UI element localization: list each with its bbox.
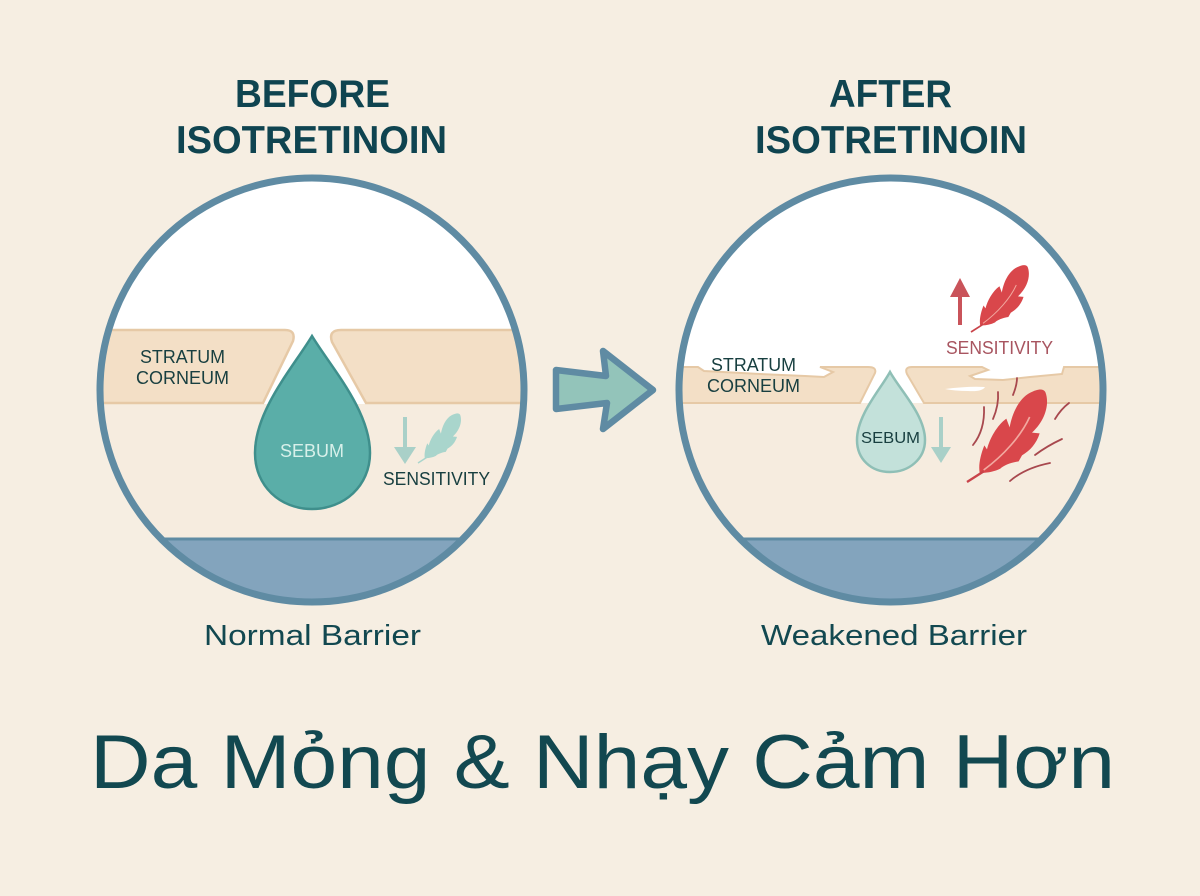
label: stratum corneum damaged: [707, 355, 800, 396]
dermis layer: [164, 538, 460, 598]
icon: sebum down arrow: [931, 417, 951, 463]
label: stratum corneum damaged: STRATUM: [711, 355, 796, 375]
circle outline: [679, 178, 1103, 602]
label: sensitivity low: SENSITIVITY: [383, 469, 490, 489]
label: sensitivity high: SENSITIVITY: [946, 338, 1053, 358]
caption: weakened barrier: Weakened Barrier: [761, 620, 1027, 652]
heading: before isotretinoin: [176, 73, 447, 162]
panel: weakened barrier skin diagram: [670, 170, 1120, 610]
icon: red up arrow: [950, 278, 970, 325]
arrow: before to after: [556, 351, 653, 429]
heading: after isotretinoin: ISOTRETINOIN: [755, 119, 1027, 162]
heading: before isotretinoin: ISOTRETINOIN: [176, 119, 447, 162]
dermis layer: [744, 538, 1038, 598]
sebum drop small: [857, 372, 925, 472]
skin layer: stratum corneum left: [90, 330, 294, 403]
label: stratum corneum: [136, 347, 229, 388]
title: Da Mỏng & Nhạy Cảm Hơn: [90, 720, 1115, 805]
circle outline: [100, 178, 524, 602]
icon: down arrow, light teal: [394, 417, 416, 464]
damaged layer: stratum corneum right: [906, 367, 1120, 403]
crack in barrier: [945, 387, 985, 391]
heading: after isotretinoin: AFTER: [829, 73, 952, 116]
icon: red feather small: [971, 265, 1029, 332]
label: stratum corneum: CORNEUM: [136, 368, 229, 388]
caption: normal barrier: Normal Barrier: [204, 620, 421, 652]
label: sebum: SEBUM: [280, 441, 344, 461]
icon: red feather large with motion lines: [967, 378, 1069, 482]
label: stratum corneum: STRATUM: [140, 347, 225, 367]
sebum drop large: [255, 336, 370, 509]
damaged layer: stratum corneum left: [670, 367, 875, 403]
heading: before isotretinoin: BEFORE: [235, 73, 390, 116]
skin layer: stratum corneum right: [331, 330, 540, 403]
label: stratum corneum damaged: CORNEUM: [707, 376, 800, 396]
label: sebum small: SEBUM: [861, 430, 920, 447]
icon: pale feather: [418, 413, 461, 463]
panel: normal barrier skin diagram: [90, 170, 540, 610]
heading: after isotretinoin: [755, 73, 1027, 162]
